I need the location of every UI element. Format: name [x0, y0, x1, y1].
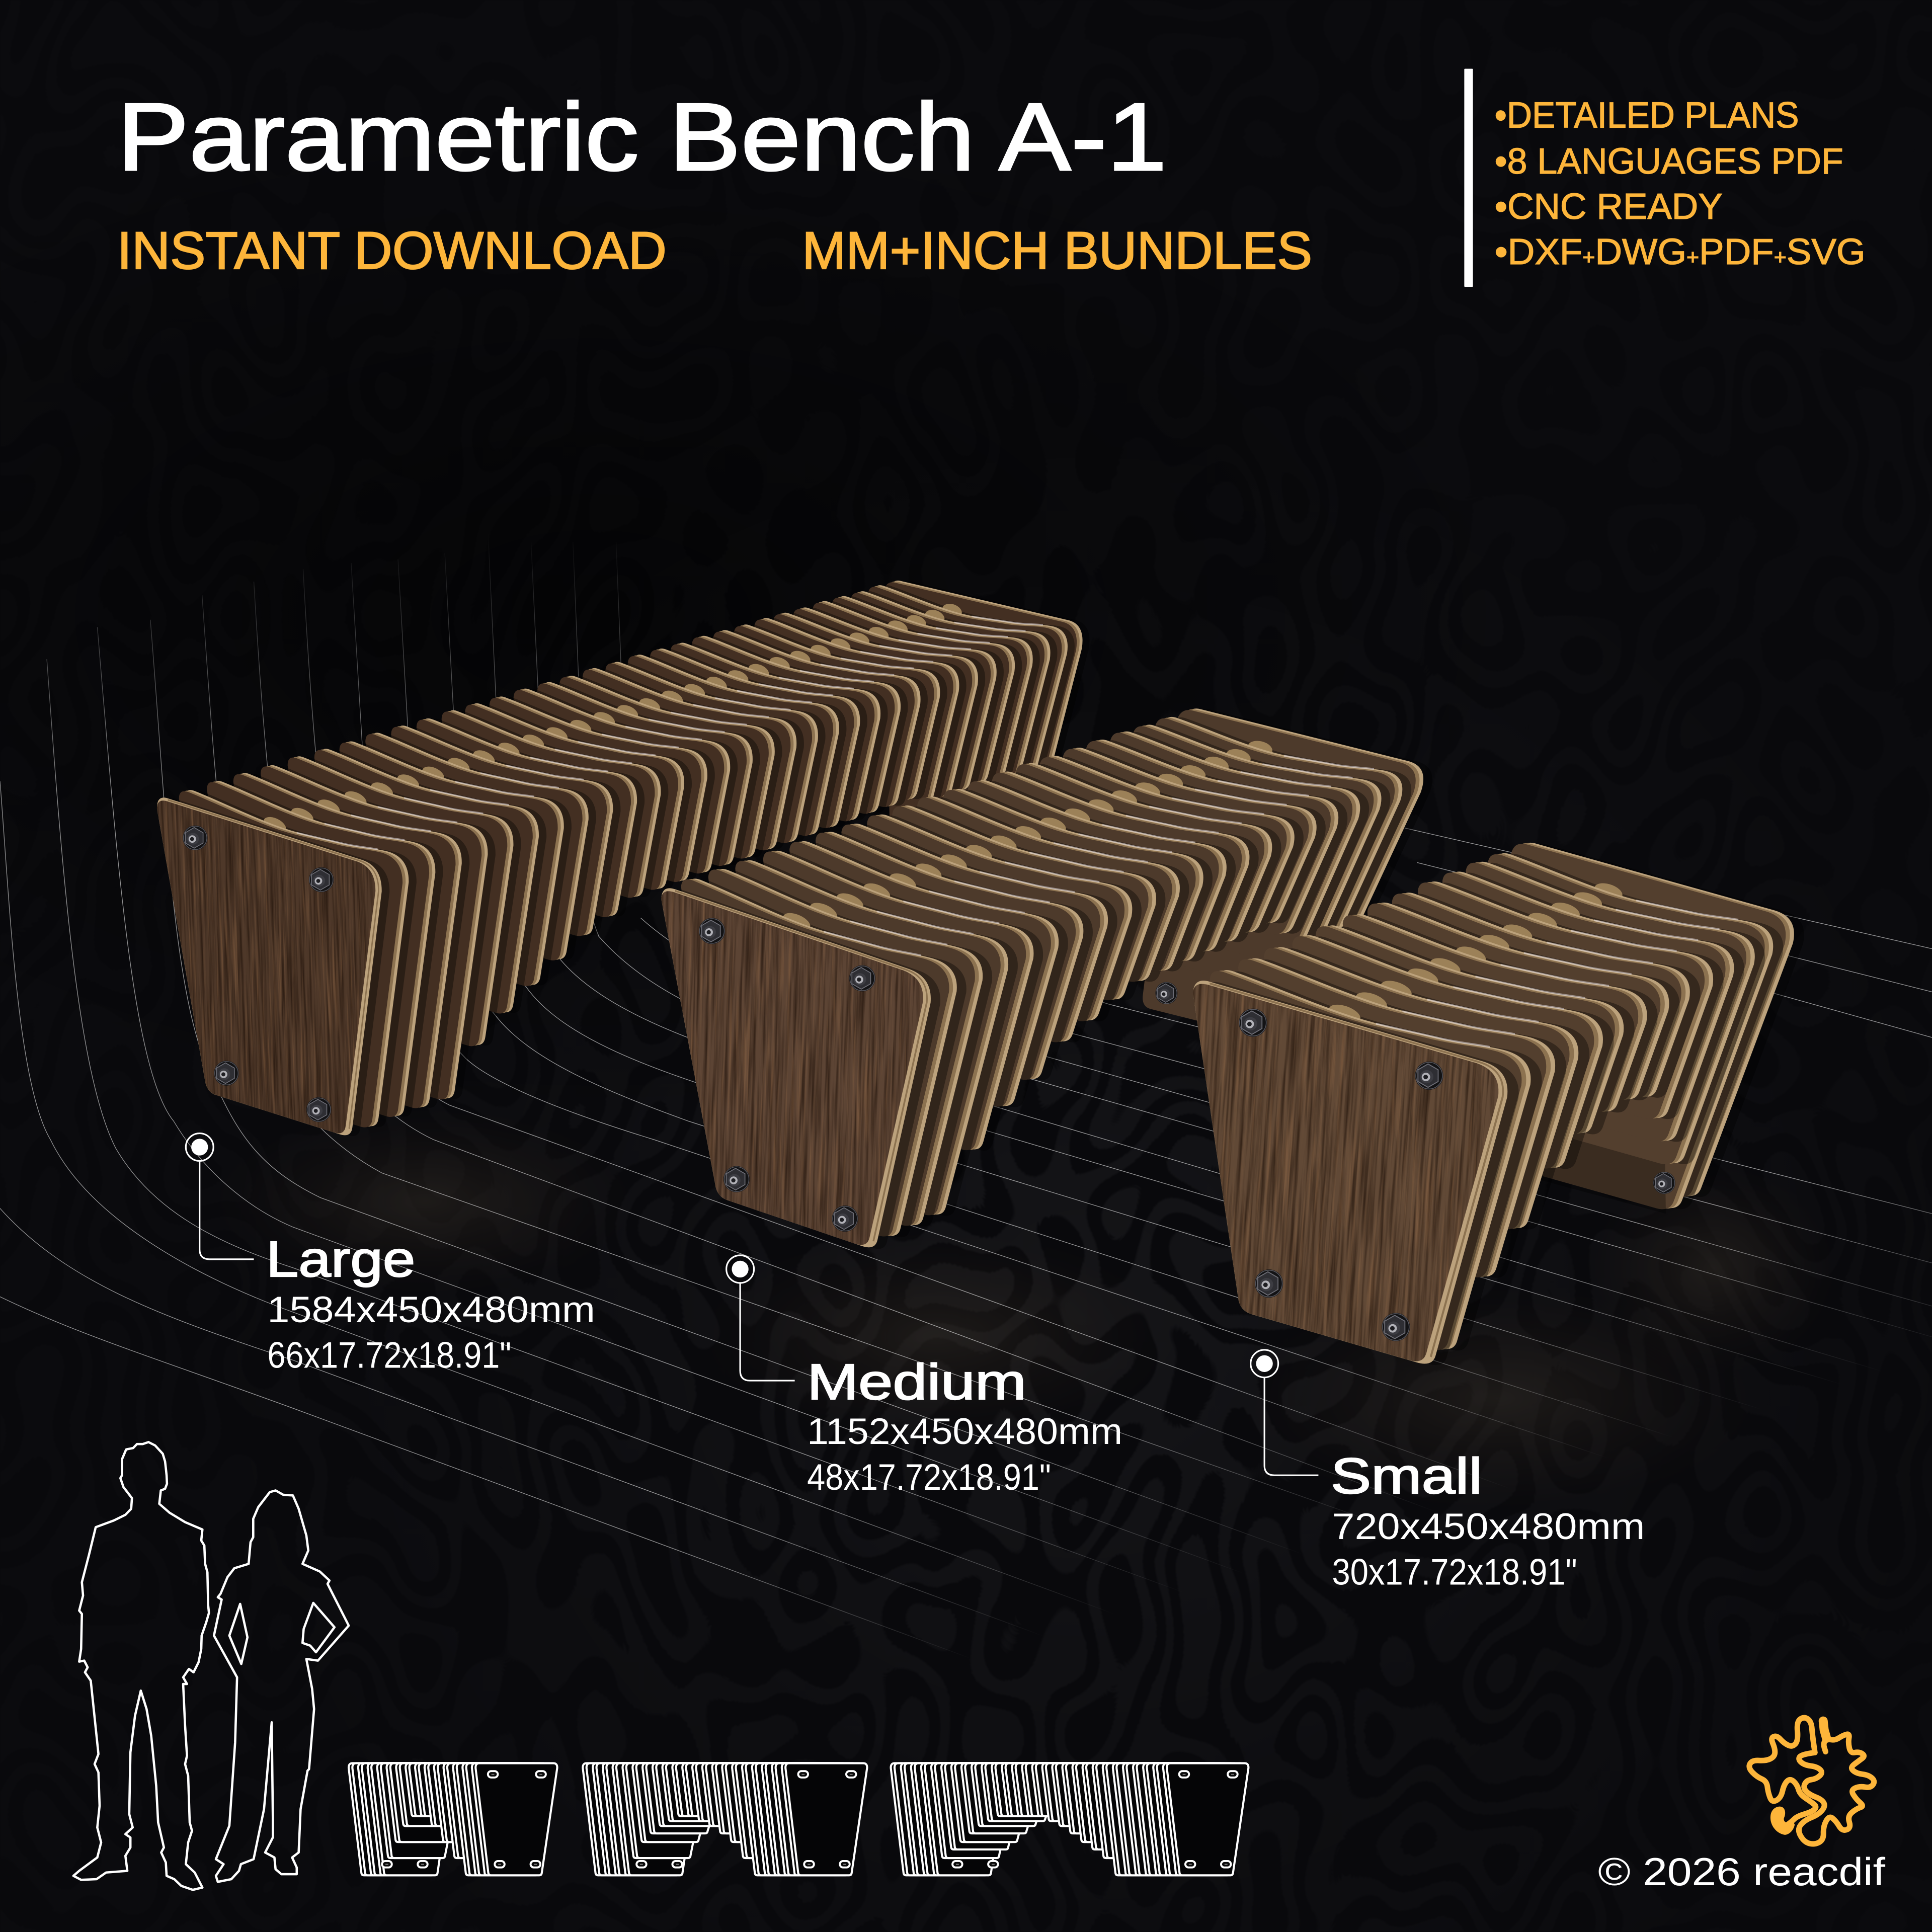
line drawing: medium bench [583, 1763, 867, 1875]
rear bolt: medium bench [1155, 982, 1177, 1004]
callout: large [186, 1134, 595, 1376]
marker: large [186, 1134, 254, 1259]
line drawing: small bench [349, 1763, 557, 1875]
callout: small [1251, 1350, 1645, 1592]
bench: large [156, 576, 1092, 1153]
slats: large bench [179, 576, 1092, 1147]
text: medium: Medium [807, 1354, 1026, 1410]
divider bar [1464, 69, 1473, 287]
marker: medium [727, 1255, 795, 1381]
bench: medium [653, 702, 1437, 1270]
text: large: 1584x450x480mm [267, 1289, 595, 1330]
text: large: 66x17.72x18.91" [267, 1334, 511, 1376]
text: small: 720x450x480mm [1332, 1505, 1645, 1547]
bolts: medium bench [699, 918, 875, 1232]
text: small [1331, 1448, 1645, 1592]
callout: medium [727, 1255, 1122, 1498]
text: medium [807, 1354, 1122, 1498]
feature list: •CNC READY [1495, 187, 1723, 227]
front panel: medium bench [653, 883, 941, 1270]
icon: man outline [73, 1442, 209, 1890]
text: large: Large [266, 1231, 415, 1287]
subtitle: instant download: INSTANT DOWNLOAD [117, 221, 667, 280]
rear bolt: small bench [1653, 1172, 1675, 1194]
slats: small bench [1187, 836, 1808, 1375]
subtitle: bundles: MM+INCH BUNDLES [802, 221, 1312, 280]
icon: woman outline [214, 1490, 349, 1882]
logo [1749, 1718, 1874, 1844]
front panel: small bench [1173, 975, 1520, 1387]
feature list [1495, 95, 1866, 272]
text: large [266, 1231, 595, 1376]
front panel: large bench [156, 793, 398, 1153]
bolts: large bench [183, 826, 334, 1122]
title: Parametric Bench A-1 [117, 84, 1167, 191]
text: small: 30x17.72x18.91" [1332, 1551, 1577, 1592]
feature list: •DETAILED PLANS [1495, 95, 1799, 135]
copyright: © 2026 reacdif [1598, 1849, 1885, 1894]
floor reflections [216, 1109, 1836, 1509]
text: medium: 1152x450x480mm [807, 1410, 1122, 1452]
bench: small [1173, 836, 1808, 1387]
slats: medium bench [669, 702, 1437, 1261]
contour lines [0, 531, 1932, 1701]
scale figures [73, 1442, 349, 1890]
text: medium: 48x17.72x18.91" [807, 1456, 1051, 1498]
marker: small [1251, 1350, 1318, 1475]
text: small: Small [1331, 1448, 1482, 1504]
feature list: •8 LANGUAGES PDF [1495, 141, 1843, 182]
bolts: small bench [1239, 1009, 1443, 1341]
line drawing: large bench [891, 1763, 1248, 1875]
feature list: •DXF +DWG +PDF+SVG [1495, 232, 1866, 272]
